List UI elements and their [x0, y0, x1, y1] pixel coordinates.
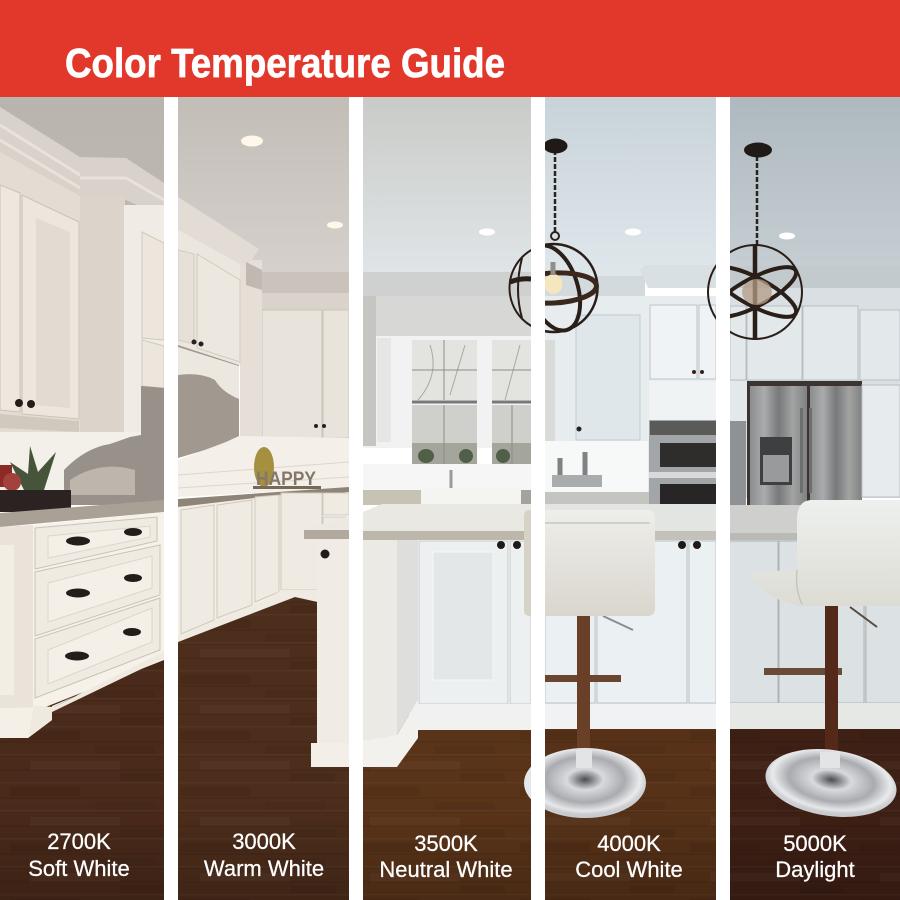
base board	[730, 703, 900, 729]
refrigerator	[747, 381, 862, 506]
backsplash	[545, 441, 648, 493]
label: 3000K: Warm White	[204, 856, 324, 881]
title: Color Temperature Guide	[65, 40, 505, 86]
upper left doors	[0, 185, 79, 419]
island base	[730, 538, 900, 708]
island countertop	[730, 505, 900, 540]
stool	[752, 500, 900, 825]
island doors	[545, 541, 716, 703]
island countertop	[363, 504, 531, 540]
upper cabinets	[730, 306, 900, 380]
island countertop	[545, 504, 716, 540]
label: 2700K: Soft White	[28, 856, 130, 881]
label: 4000K: 4000K	[597, 831, 661, 856]
label: 2700K: 2700K	[47, 829, 111, 854]
island side face	[363, 538, 418, 767]
plant and wine glass	[0, 446, 56, 491]
wall	[545, 296, 716, 492]
hex tile backsplash	[64, 386, 164, 505]
backsplash	[363, 464, 531, 492]
window panes	[412, 340, 531, 464]
upper wall behind cabinets	[0, 152, 80, 432]
faucet	[450, 470, 452, 488]
panel: 5000K daylight kitchen view	[708, 97, 900, 900]
crown molding	[730, 266, 900, 290]
label: 5000K: Daylight	[775, 857, 855, 882]
base board	[418, 704, 531, 730]
happy sign: HAPPY	[256, 469, 316, 490]
recessed light	[779, 232, 795, 240]
back wall and crown	[262, 297, 349, 310]
floor	[730, 728, 900, 900]
side counter	[363, 489, 531, 505]
tray	[0, 490, 71, 512]
range hood	[178, 345, 239, 458]
label: 3500K	[379, 831, 513, 882]
chair sliver	[524, 510, 646, 818]
wall oven	[649, 420, 716, 505]
countertop	[178, 487, 349, 507]
recessed lights	[241, 136, 343, 228]
countertop decor	[552, 452, 602, 487]
label: 3000K	[204, 833, 324, 876]
drawer handles	[65, 528, 142, 660]
panel: 4000K cool white kitchen view	[510, 97, 802, 900]
floor	[0, 640, 164, 900]
door knobs	[15, 399, 35, 408]
label: 4000K: Cool White	[575, 857, 683, 882]
upper cabinet	[178, 230, 240, 365]
header banner	[0, 0, 900, 97]
crown molding	[0, 107, 164, 205]
label: 3500K: Neutral White	[379, 857, 513, 882]
floor	[363, 715, 531, 900]
side counter	[545, 492, 649, 505]
island counter tip	[322, 516, 349, 530]
label: 3500K: 3500K	[414, 831, 478, 856]
toe kick	[178, 590, 322, 642]
label: 4000K	[575, 831, 683, 882]
recessed light	[625, 228, 641, 236]
base board	[545, 704, 716, 729]
side cabinet	[862, 385, 900, 497]
pendant sliver	[510, 244, 598, 332]
island doors	[722, 541, 900, 703]
island knobs	[678, 541, 701, 549]
backsplash	[178, 436, 349, 497]
tall cabinet	[576, 315, 640, 440]
lower cabinets	[178, 495, 281, 642]
island doors	[419, 541, 531, 704]
floor	[545, 728, 716, 900]
arched soffit	[363, 296, 531, 338]
countertop	[0, 500, 164, 527]
panel: 3000K warm white kitchen view	[178, 97, 349, 900]
toe kick	[0, 690, 89, 738]
recessed light	[479, 228, 495, 236]
label: 3000K: 3000K	[232, 829, 296, 854]
pendant light	[510, 138, 598, 337]
label: 2700K	[29, 833, 129, 876]
crown molding	[363, 272, 531, 296]
white column and right doors	[124, 205, 164, 435]
lower side panel	[0, 525, 33, 708]
valance under doors	[0, 414, 79, 432]
crown moldings	[545, 265, 716, 298]
island knobs	[497, 541, 521, 549]
pilaster	[80, 196, 125, 434]
lemon jar	[254, 447, 274, 487]
stool	[524, 510, 655, 818]
pendant light	[708, 142, 802, 340]
oven sliver	[730, 421, 746, 506]
drawers	[33, 512, 164, 712]
window sliver	[545, 340, 555, 464]
island base	[545, 538, 716, 708]
panel: 3500K neutral white kitchen view	[363, 97, 531, 900]
label: 5000K	[775, 831, 855, 882]
wall	[730, 288, 900, 498]
label: 5000K: 5000K	[783, 831, 847, 856]
pilaster	[240, 260, 262, 440]
island side	[311, 539, 349, 767]
back cabinets	[262, 310, 349, 438]
window wall	[363, 336, 531, 448]
crown molding	[178, 197, 259, 268]
backsplash glow	[0, 432, 140, 490]
upper right doors	[650, 305, 716, 379]
pendant sliver from next fixture	[708, 245, 802, 339]
floor	[178, 590, 349, 900]
panel: 2700K soft white kitchen view	[0, 97, 164, 900]
